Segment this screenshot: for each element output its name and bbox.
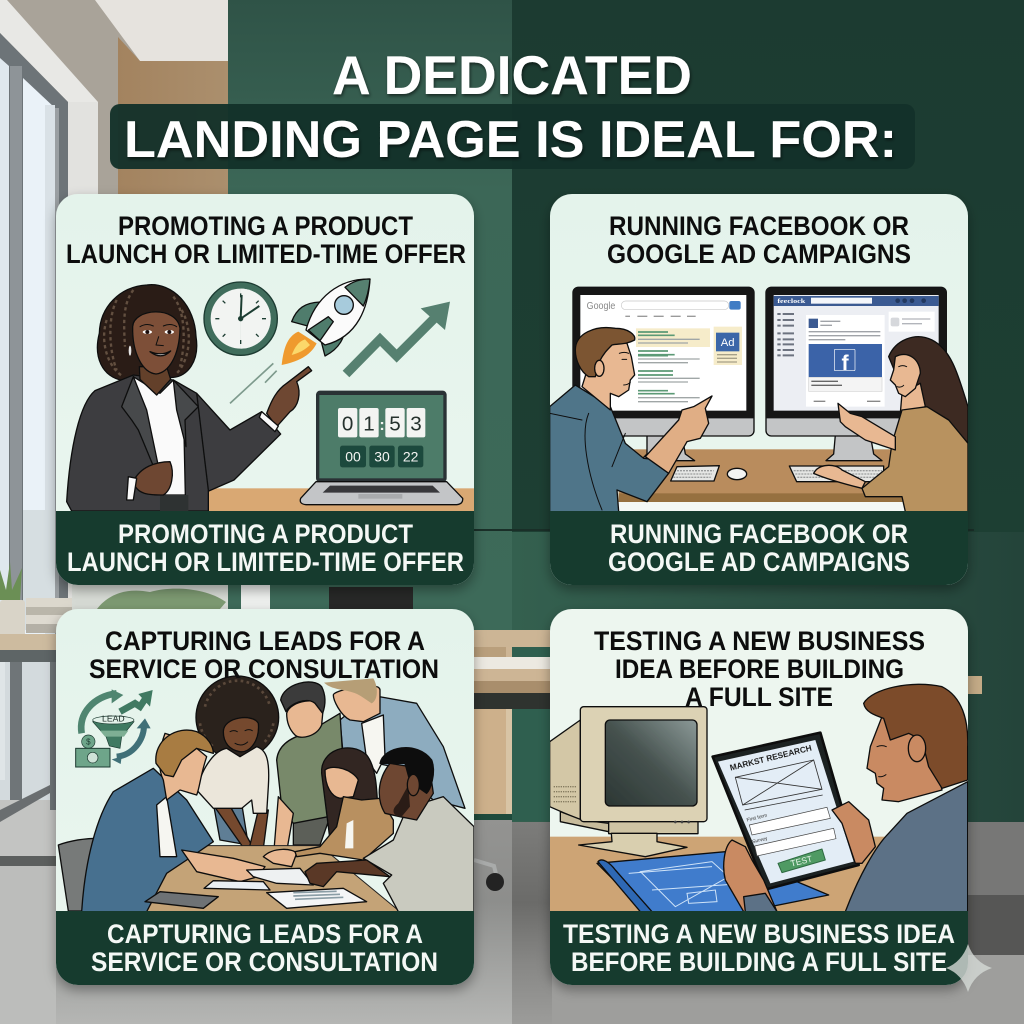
tablet with wireframe form [713, 733, 859, 889]
left monitor: Google: Google [587, 301, 616, 312]
card background [550, 609, 968, 985]
caption: GOOGLE AD CAMPAIGNS [608, 547, 910, 577]
man pointing at screen [550, 328, 712, 512]
heading: LAUNCH OR LIMITED-TIME OFFER [66, 239, 466, 269]
floor [0, 800, 1024, 1024]
heading: IDEA BEFORE BUILDING [615, 654, 904, 684]
chairs [550, 466, 969, 512]
laptop with countdown [300, 391, 463, 505]
hands at center [263, 849, 297, 867]
icon: clock [204, 282, 277, 355]
caption [67, 519, 464, 577]
right monitor: Facebook [766, 287, 946, 461]
icon: lead funnel and money: LEAD [102, 714, 125, 724]
heading [66, 211, 466, 269]
old CRT computer [550, 707, 707, 857]
ceiling, wood and window wall [0, 0, 228, 640]
blueprint [597, 852, 829, 912]
front people [82, 730, 474, 912]
table [148, 845, 398, 911]
tablet with wireframe form: Survey [752, 836, 769, 845]
caption band [56, 911, 474, 985]
woman with long hair [295, 748, 393, 860]
caption band [56, 511, 474, 585]
laptop with countdown: 3 [410, 413, 422, 436]
left monitor: Google [573, 287, 754, 461]
title backing pill [110, 104, 915, 169]
caption: CAPTURING LEADS FOR A [107, 919, 423, 949]
caption: RUNNING FACEBOOK OR [610, 519, 908, 549]
right monitor: Facebook: feeclock [777, 298, 806, 305]
illustration: two people at Google and Facebook monitors [550, 287, 969, 512]
man in blue shirt [82, 730, 265, 912]
desk [619, 449, 905, 502]
laptop with countdown: 00 [345, 449, 361, 465]
card background [550, 194, 968, 585]
heading: RUNNING FACEBOOK OR [609, 211, 909, 241]
caption [91, 919, 438, 977]
heading [89, 626, 439, 684]
laptop with countdown: 30 [374, 449, 390, 465]
illustration: team around a table with lead funnel icon [58, 676, 474, 912]
caption: BEFORE BUILDING A FULL SITE [571, 947, 947, 977]
icon: lead funnel and money: $ [86, 738, 91, 747]
icon: sparkle watermark [946, 944, 992, 992]
panel: running ad campaigns [550, 194, 969, 585]
tablet with wireframe form: First form [746, 813, 768, 824]
right monitor: Facebook: f [841, 351, 849, 375]
man in green sweater [274, 682, 343, 852]
chair [58, 838, 93, 911]
panel: testing a new business idea [550, 609, 968, 985]
heading: A FULL SITE [685, 682, 833, 712]
heading: SERVICE OR CONSULTATION [89, 654, 439, 684]
window below desk [0, 650, 56, 822]
caption: TESTING A NEW BUSINESS IDEA [563, 919, 955, 949]
card background [56, 194, 474, 585]
plant and books [0, 562, 72, 637]
icon: growth arrow [346, 302, 450, 374]
caption [563, 919, 955, 977]
icon: lead funnel and money [76, 689, 153, 767]
man in grey shirt [305, 748, 474, 912]
heading [594, 626, 925, 712]
heading: TESTING A NEW BUSINESS [594, 626, 925, 656]
keyboards and mouse [671, 466, 884, 482]
heading: PROMOTING A PRODUCT [118, 211, 413, 241]
tablet with wireframe form: MARKST RESEARCH [729, 743, 813, 773]
laptop with countdown: 1 [363, 413, 375, 436]
woman pointing at screen [814, 337, 968, 512]
title: LANDING PAGE IS IDEAL FOR: [124, 111, 897, 169]
panel: promoting a product launch [56, 194, 474, 585]
caption band [550, 511, 968, 585]
icon: rocket [282, 279, 370, 365]
laptop with countdown: 5 [389, 413, 401, 436]
potted plant behind cards [97, 589, 226, 609]
chair [329, 587, 413, 611]
card background [56, 609, 474, 985]
desk [550, 837, 886, 912]
left monitor: Google: Ad [721, 337, 735, 349]
laptop with countdown: 22 [403, 449, 419, 465]
caption: SERVICE OR CONSULTATION [91, 947, 438, 977]
caption band [550, 911, 968, 985]
illustration: old computer, tablet wireframe, blueprint [550, 684, 968, 912]
caption: LAUNCH OR LIMITED-TIME OFFER [67, 547, 464, 577]
chair wheel [474, 860, 504, 891]
woman with afro [196, 676, 279, 853]
tablet with wireframe form: TEST [789, 853, 814, 869]
laptop with countdown: : [379, 417, 385, 434]
title [110, 44, 915, 169]
panel: capturing leads [56, 609, 474, 985]
heading [607, 211, 911, 269]
heading: GOOGLE AD CAMPAIGNS [607, 239, 911, 269]
person [845, 684, 968, 912]
laptop with countdown: 0 [342, 413, 353, 436]
title: A DEDICATED [332, 44, 692, 106]
presenter [67, 285, 312, 512]
back people [196, 676, 465, 853]
illustration: presenter, clock, rocket, growth arrow, countdown laptop [67, 279, 474, 512]
desk and cabinet [474, 630, 982, 821]
papers [247, 868, 313, 885]
blond man [324, 678, 465, 808]
hands [724, 802, 875, 912]
caption [608, 519, 910, 577]
heading: CAPTURING LEADS FOR A [105, 626, 425, 656]
caption: PROMOTING A PRODUCT [118, 519, 413, 549]
